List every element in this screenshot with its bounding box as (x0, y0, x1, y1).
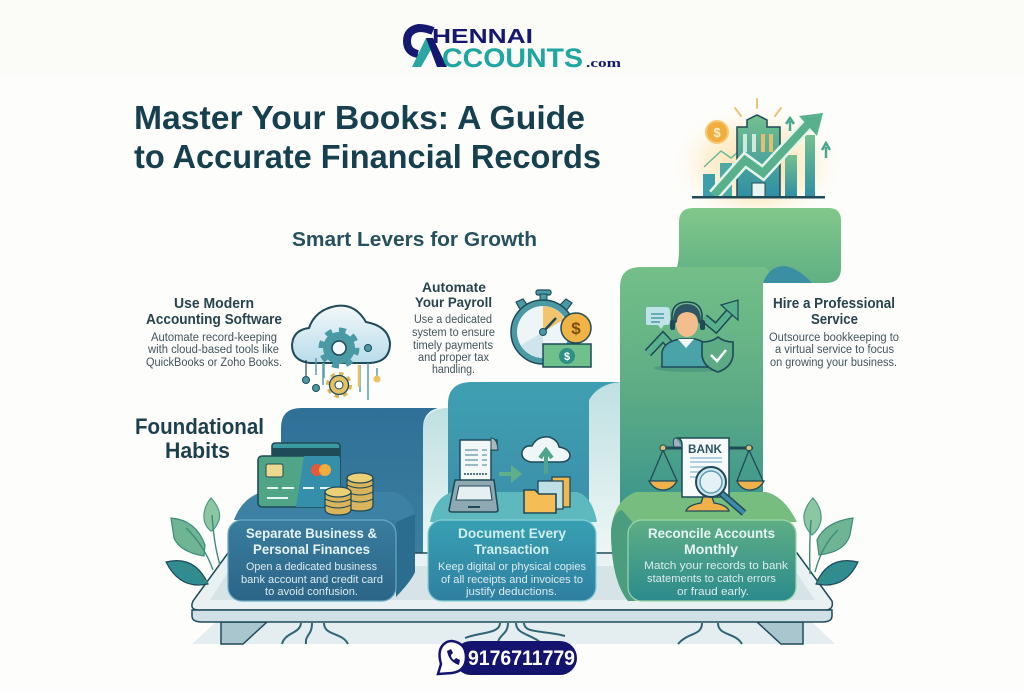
text: Hire a Professional Service: Hire a Professional (773, 296, 895, 312)
text: Automate Your Payroll: Your Payroll (415, 295, 492, 310)
block 1: separate finances (228, 492, 415, 601)
text: Use Modern Accounting Software: Automate record-keeping (151, 332, 277, 344)
text: block 1: Open a dedicated business (246, 561, 377, 573)
icon: cloud with gears (292, 306, 390, 400)
text: block 3: Monthly (684, 541, 738, 557)
text: block 1: Personal Finances (253, 541, 370, 557)
text: block 1: to avoid confusion. (265, 586, 358, 598)
text: Hire a Professional Service (769, 296, 899, 369)
text: block 3: or fraud early. (677, 586, 749, 598)
text: block 3: Reconcile Accounts (648, 525, 775, 541)
text: Use Modern Accounting Software: with cloud-based tools like (147, 344, 279, 356)
whatsapp phone badge (438, 641, 577, 675)
text: Use Modern Accounting Software: Use Modern (174, 296, 254, 312)
block 3: reconcile accounts (611, 492, 797, 601)
text: block 2: justify deductions. (465, 586, 557, 598)
text: block 2: of all receipts and invoices to (441, 574, 583, 586)
icon: growth building and chart (669, 99, 845, 227)
text: Automate Your Payroll: and proper tax (418, 352, 489, 364)
text: Hire a Professional Service: on growing your business. (770, 357, 897, 369)
heading: Foundational Habits (135, 414, 264, 463)
text: block 3 (644, 525, 789, 598)
heading: Smart Levers for Growth: Smart Levers for Growth (292, 229, 537, 251)
text: Automate Your Payroll (412, 280, 495, 376)
text: block 1 (241, 525, 383, 598)
logo: Chennai Accounts (407, 26, 621, 73)
text: Use Modern Accounting Software: Accounting Software (146, 312, 282, 328)
text: Use Modern Accounting Software: QuickBooks or Zoho Books. (146, 357, 282, 369)
heading: Foundational Habits: Habits (165, 438, 230, 463)
step 2 panel (448, 382, 620, 553)
text: block 2: Document Every (458, 525, 566, 541)
text: block 3: statements to catch errors (647, 573, 776, 585)
ribbon step 3: green lever (620, 208, 841, 553)
text: Hire a Professional Service: Service (811, 312, 858, 328)
text: Automate Your Payroll: timely payments (413, 340, 493, 352)
text: Automate Your Payroll: Use a dedicated (414, 314, 492, 326)
icon: bank statement scales and magnifier: BANK (688, 442, 722, 456)
logo: Chennai Accounts: CCOUNTS (442, 43, 583, 73)
icon: stopwatch with money: $ (564, 351, 570, 363)
title (134, 99, 601, 175)
icon: support agent with shield (646, 300, 738, 372)
heading: Foundational Habits: Foundational (135, 414, 264, 439)
text: block 1: Separate Business & (246, 525, 377, 541)
icon: stopwatch with money: $ (571, 319, 581, 338)
icon: stopwatch with money (511, 290, 591, 367)
text: Automate Your Payroll: handling. (432, 364, 475, 376)
icon: growth building and chart: $ (713, 125, 721, 140)
text: block 2: Keep digital or physical copies (438, 561, 586, 573)
table platform (192, 553, 835, 644)
text: block 1: bank account and credit card (241, 574, 383, 586)
icon: right leaves (804, 498, 858, 585)
title: Master Your Books: A Guide (134, 99, 585, 136)
block 2: document transactions (428, 492, 597, 601)
icon: credit cards and coins (258, 443, 373, 515)
text: block 3: Match your records to bank (644, 560, 789, 572)
text: Hire a Professional Service: Outsource bookkeeping to (769, 332, 899, 344)
icon: left leaves (166, 498, 220, 585)
text: Automate Your Payroll: system to ensure (412, 327, 495, 339)
logo: Chennai Accounts: HENNAI (432, 26, 533, 48)
text: block 2: Transaction (474, 541, 549, 557)
whatsapp phone badge: 9176711779 (468, 647, 575, 670)
text: Use Modern Accounting Software (146, 296, 282, 369)
logo: Chennai Accounts: .com (586, 55, 621, 70)
step 1 panel (281, 408, 448, 553)
text: Automate Your Payroll: Automate (422, 280, 486, 295)
icon: bank statement scales and magnifier (649, 438, 764, 513)
text: block 2 (438, 525, 586, 598)
icon: receipt scanner to cloud folders (449, 437, 570, 513)
text: Hire a Professional Service: a virtual service to focus (775, 344, 894, 356)
title: to Accurate Financial Records (134, 138, 601, 175)
